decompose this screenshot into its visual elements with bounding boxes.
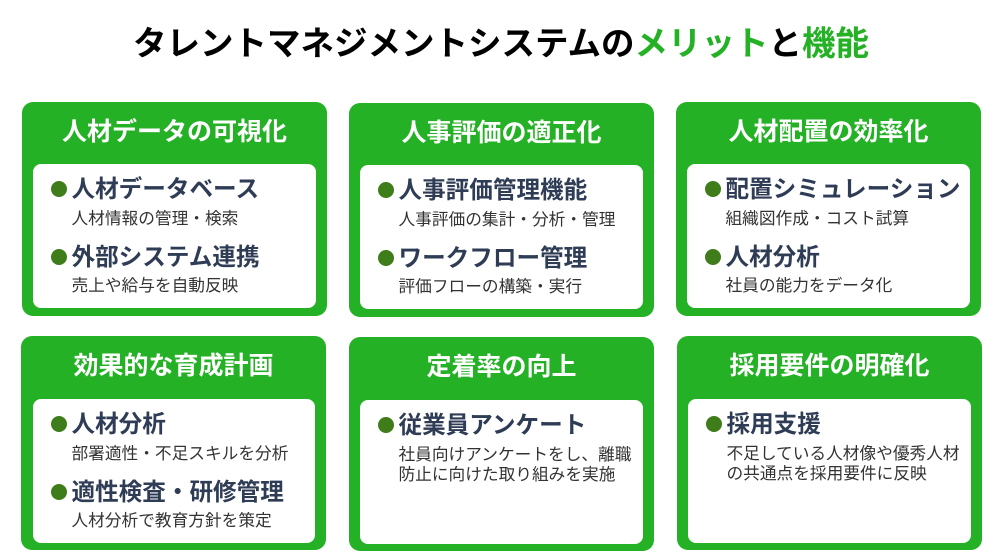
bullet	[51, 484, 67, 500]
item title: 人材分析	[726, 245, 820, 271]
item description: 社員向けアンケートをし、離職	[398, 445, 631, 464]
white card	[360, 165, 643, 309]
item description: 社員の能力をデータ化	[726, 276, 892, 295]
panel: staff placement	[676, 102, 981, 316]
heading: 定着率の向上	[426, 353, 576, 381]
bullet	[705, 181, 721, 197]
heading: 採用要件の明確化	[729, 352, 930, 380]
panel: talent data visualization	[22, 102, 327, 316]
item title: 人事評価管理機能	[398, 178, 587, 204]
panel: training plan	[21, 336, 326, 550]
item description: 不足している人材像や優秀人材	[726, 444, 960, 463]
white card	[687, 164, 970, 308]
bullet	[51, 416, 67, 432]
item description: 人材情報の管理・検索	[72, 209, 238, 228]
bullet	[51, 249, 67, 265]
heading: 効果的な育成計画	[73, 352, 274, 380]
bullet	[705, 249, 721, 265]
item description: 防止に向けた取り組みを実施	[398, 465, 615, 484]
item title: 人材データベース	[72, 177, 259, 203]
white card	[33, 399, 315, 543]
item title: 従業員アンケート	[398, 413, 586, 439]
panel: retention	[349, 337, 654, 551]
heading: 人事評価の適正化	[401, 119, 602, 147]
panel: HR evaluation	[349, 103, 654, 317]
item description: の共通点を採用要件に反映	[726, 464, 927, 483]
panel: hiring requirements	[677, 336, 982, 550]
heading: 人材配置の効率化	[728, 118, 928, 146]
item title: 採用支援	[726, 412, 821, 438]
item description	[398, 445, 631, 484]
item description: 人材分析で教育方針を策定	[72, 511, 272, 530]
heading: 人材データの可視化	[62, 118, 287, 146]
item description: 組織図作成・コスト試算	[726, 209, 909, 228]
item title: 人材分析	[72, 412, 166, 438]
bullet	[51, 181, 67, 197]
bullet	[378, 417, 394, 433]
bullet	[378, 182, 394, 198]
item title: ワークフロー管理	[398, 246, 587, 272]
item description: 売上や給与を自動反映	[72, 276, 238, 295]
item description	[726, 444, 960, 483]
item description: 評価フローの構築・実行	[398, 277, 582, 296]
white card	[33, 164, 316, 308]
bullet	[378, 250, 394, 266]
white card	[688, 399, 971, 543]
item title: 適性検査・研修管理	[72, 480, 284, 506]
item description: 人事評価の集計・分析・管理	[398, 210, 615, 229]
item description: 部署適性・不足スキルを分析	[72, 444, 288, 463]
bullet	[706, 416, 722, 432]
item title: 配置シミュレーション	[726, 177, 960, 203]
item title: 外部システム連携	[72, 245, 260, 271]
title: タレントマネジメントシステムのメリットと機能	[133, 26, 869, 63]
white card	[360, 400, 643, 544]
